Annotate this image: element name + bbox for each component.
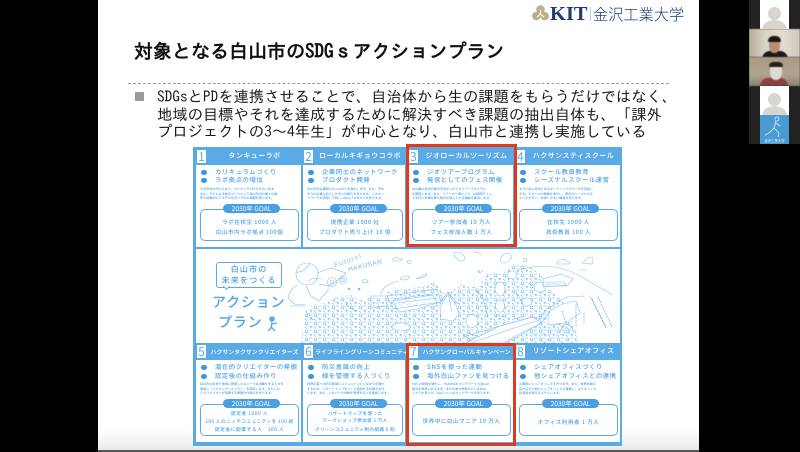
panel 1: ラボ在校生 1000 人 [222, 218, 277, 226]
panel 2: 2030年 GOAL [339, 203, 378, 213]
bullet marker [135, 92, 144, 101]
panel 6: ハザードマップを使った [328, 411, 382, 417]
panel: center banner [196, 249, 620, 343]
panel 7: ファンを見つけ、白山ファンのネットワークを作ります。 [412, 390, 492, 395]
panel 7: SNSを使った運動 [427, 362, 482, 371]
panel 8: 広がるその他のシェアオフィスと連携し、よりオフィス [519, 386, 596, 391]
panel 3: ジオツアープログラム [427, 167, 495, 176]
panel 4: シーズナルスクール運営 [534, 175, 610, 184]
panel 6: ライフライングリーンコミュニティ [315, 347, 409, 356]
panel 7: 2030年 GOAL [444, 398, 483, 408]
panel 2: トワークを活用して新しい白山プロダクトを作ります。 [307, 195, 384, 200]
panel 3: 白山麓の自然の魅力を生かしたジオツアープログラム [412, 186, 486, 191]
participant avatar 2 [760, 86, 789, 115]
white hill shapes [392, 271, 580, 343]
panel 2: 白山市内企業間とのつながりを強化します。また、市外 [307, 186, 384, 191]
participant video 1 [749, 29, 800, 57]
panel 8: オフィス利用者 1 万人 [538, 418, 599, 426]
action plan heading: プラン [218, 312, 262, 332]
panel 8: 利用者が増えるようにします。 [519, 390, 562, 395]
panel 5: ハクサンタクサンクリエイターズ [211, 347, 298, 356]
panel 3: 発信としてのフェス開催 [427, 175, 503, 184]
slide background [98, 0, 699, 452]
panel 1: 所で試験的にミエラボを作りラボの展開を図ります。 [200, 195, 274, 200]
panel 4 [517, 148, 620, 247]
panel 6: 6 [305, 343, 312, 360]
panel 4: クールを行い、参加しやすい機会を作ります。 [519, 195, 584, 200]
panel 2: 2 [305, 148, 312, 165]
panel 1: 2030年 GOAL [232, 203, 271, 213]
panel 1 [196, 148, 301, 247]
panel 1: 1 [198, 148, 205, 165]
panel 1: 小中学校が中心となり、カリキュラム作りを行います。 [200, 186, 277, 191]
panel 5: 100 人のニッチコミュニティを 100 組 [205, 418, 294, 425]
panel 4: 技術教員 100 人 [546, 228, 591, 236]
action plan heading: アクション [212, 292, 285, 312]
panel 5: 2030年 GOAL [232, 398, 271, 408]
panel 6: 2030年 GOAL [339, 398, 378, 408]
distant hill and clouds [362, 252, 612, 295]
panel 4: ます。スクールの教員を増やし、夏冬のシーズナルス [519, 191, 593, 196]
speech bubble heading: 白山市の [231, 263, 267, 275]
panel 1: カリキュラムづくり [215, 167, 277, 176]
panel 7: SNS の発信を強化し、HAKUSAN というワードと白山の [412, 381, 490, 386]
panel 3: ジオローカルツーリズム [426, 151, 507, 161]
participant tile: blue logo: 金沢工業大学 [764, 138, 785, 143]
participant video 2 [749, 57, 800, 86]
panel 1: ラボ拠点の増加 [215, 175, 263, 184]
panel 4: 在校生 1000 人 [547, 218, 590, 226]
panel 3: ツアー参加者 10 万人 [432, 218, 491, 226]
university logo [532, 3, 684, 25]
panel 2: ローカルキギョウコラボ [319, 151, 401, 161]
town and forest texture [301, 264, 579, 347]
panel 2: 提携企業 1000 社 [331, 218, 379, 226]
highlight box: panel 3 [406, 144, 517, 247]
panel 6: グリーンコミュニティ制内組織 6 割 [315, 427, 395, 433]
panel 7: 7 [410, 343, 417, 360]
icon: KIT emblem [532, 5, 549, 20]
panel 4: ハクサンスティスクール [533, 151, 614, 161]
panel 5: 白山市の各地で地域に密着したユニークな活動をする人々を [200, 381, 284, 386]
panel 3: フェス参加人数 1 万人 [430, 228, 493, 236]
panel 4: 4 [517, 148, 524, 165]
panel 2: からの企業も加入しやすい仕組みを作ります。このネッ [307, 191, 384, 196]
panel 8: 山間部にシェアオフィスを作ります。また、世界各国に [519, 381, 596, 386]
panel: center banner: HAKUSAN [348, 258, 383, 273]
action plan heading [212, 292, 285, 332]
panel 8: シェアオフィスづくり [534, 362, 603, 371]
panel 6: するため、ハザードマップをつくり適用する仕組みを作 [307, 386, 384, 391]
panel 2: 企業同士のネットワーク [322, 167, 398, 176]
panel 1: また、ラボとなる拠点づくりとして白山市内の様々な場 [200, 191, 277, 196]
body text [157, 89, 677, 139]
panel 7 [409, 343, 513, 442]
panel 6: 防災意識の向上 [322, 362, 370, 371]
panel 4: すでに白山市内にあるボーディングスクールを活用し [519, 186, 593, 191]
panel 5: 発見し「ハクサンクリエイター」を認定します。またこれ [200, 386, 280, 391]
panel 1: 白山市内ラボ拠点 100個 [216, 228, 283, 236]
panel 4: スクール教員教育 [534, 167, 589, 176]
panel 5: 5 [198, 343, 205, 360]
panel 8: 2030年 GOAL [551, 398, 590, 408]
panel 5: 認定者 1000 人 [231, 410, 268, 417]
panel 4: 2030年 GOAL [551, 203, 590, 213]
panel 6: 自然災害への防災意識とコミュニティのつながりを強化 [307, 381, 384, 386]
panel 6: ります。また、ジオパーク内緑を管理する人を育成します。 [307, 390, 390, 395]
panel 7: 魅力を世界に広げます。また日本や世界中にいる白山 [412, 386, 486, 391]
person with binoculars [288, 263, 360, 306]
illustration lettering: Future! [332, 251, 363, 270]
panel 1: タンキューラボ [228, 151, 281, 161]
panel 5: 認定後の仕組み作り [215, 371, 277, 380]
panel 5 [196, 343, 301, 442]
speech bubble tail [223, 283, 230, 290]
panel 8: 8 [517, 343, 524, 360]
title: 対象となる白山市のSDGｓアクションプラン [134, 42, 504, 61]
panel 3 [409, 148, 513, 244]
panel 6: 緑を管理する人づくり [322, 371, 391, 380]
panel 6: ワークショップ参加者 1 万人 [322, 418, 388, 424]
body text: SDGsとPDを連携させることで、自治体から生の課題をもらうだけではなく、 [157, 89, 677, 104]
panel 8: 他シェアオフィスとの連携 [534, 371, 617, 380]
panel 5: 認定後に副業する人 100 人 [215, 426, 284, 433]
highlight box: panel 7 [406, 343, 516, 446]
panel 2 [303, 148, 405, 247]
poster: action plan [193, 147, 622, 446]
participant tile: blue logo [760, 115, 789, 144]
body text: 地域の目標やそれを達成するために解決すべき課題の抽出自体も、「課外 [157, 107, 662, 122]
panel 3: を開発します。また、ツアーの一環として、山間部でフェ [412, 191, 492, 196]
panel 7: ハクサングローバルキャンペーン [422, 347, 510, 356]
panel 2: プロダクト売り上げ 10 億 [319, 228, 391, 236]
panel 8: リゾートシェアオフィス [533, 346, 614, 356]
panel 3: 3 [410, 148, 417, 165]
panel 7: 世界中に白山マニア 10 万人 [423, 417, 500, 425]
panel 6 [303, 343, 409, 442]
body text: プロジェクトの3～4年生」が中心となり、白山市と連携し実施している [157, 124, 646, 139]
panel 3: 2030年 GOAL [444, 203, 483, 213]
panel 3: スを行い多様な軍に魅力が感じられる機会を創出します。 [412, 195, 492, 200]
logo wordmark KIT: KIT [550, 3, 588, 25]
video gallery strip [749, 0, 800, 144]
panel 2: プロダクト開発 [322, 175, 370, 184]
illustration: Hakusan town [288, 252, 612, 343]
speech bubble heading: 未来をつくる [222, 274, 276, 286]
speech bubble heading [216, 262, 282, 288]
panel 7: 海外白山ファンを見つける [427, 371, 510, 380]
panel 5: 潜在的クリエイターの発掘 [215, 362, 298, 371]
participant avatar 1 [760, 0, 789, 29]
icon: running figure [268, 316, 278, 332]
panel 8 [516, 343, 620, 442]
panel 5: らクリエイターが活躍する事業や仕組みを作ります。 [200, 390, 274, 395]
logo wordmark Japanese: 金沢工業大学 [593, 3, 684, 25]
scattered tree marks [306, 283, 612, 327]
